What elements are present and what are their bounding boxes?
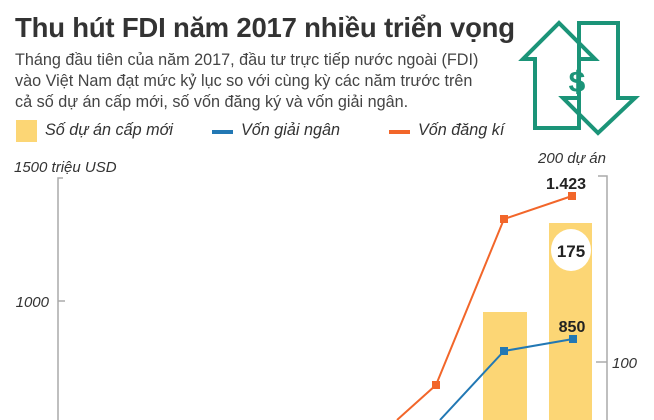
intro text (15, 51, 478, 111)
line: registered capital: 1.423 (546, 176, 586, 193)
left axis: 1000 (16, 294, 50, 311)
icon: dollar arrows: $ (569, 66, 586, 99)
bars: new projects: 175 (557, 242, 585, 261)
legend: disbursed: Vốn giải ngân (241, 121, 340, 139)
legend: new projects (16, 120, 174, 142)
legend: registered: Vốn đăng kí (418, 121, 504, 139)
left axis (14, 159, 117, 420)
chart (14, 150, 638, 420)
intro text: cả số dự án cấp mới, số vốn đăng ký và vốn giải ngân. (15, 93, 408, 111)
line: registered capital (397, 176, 586, 420)
intro text: Tháng đầu tiên của năm 2017, đầu tư trực tiếp nước ngoài (FDI) (15, 51, 478, 69)
icon: dollar arrows (518, 20, 640, 136)
right axis: 100 (612, 355, 638, 372)
line: disbursed capital (440, 319, 585, 420)
left axis: 1500 triệu USD (14, 159, 117, 176)
legend (16, 120, 506, 142)
title: Thu hút FDI năm 2017 nhiều triển vọng (15, 12, 515, 43)
line: disbursed capital: 850 (559, 319, 585, 336)
intro text: vào Việt Nam đạt mức kỷ lục so với cùng kỳ các năm trước trên (15, 72, 472, 90)
right axis (537, 150, 638, 420)
bars: new projects (483, 223, 592, 420)
right axis: 200 dự án (537, 150, 606, 167)
legend: new projects: Số dự án cấp mới (45, 121, 173, 139)
